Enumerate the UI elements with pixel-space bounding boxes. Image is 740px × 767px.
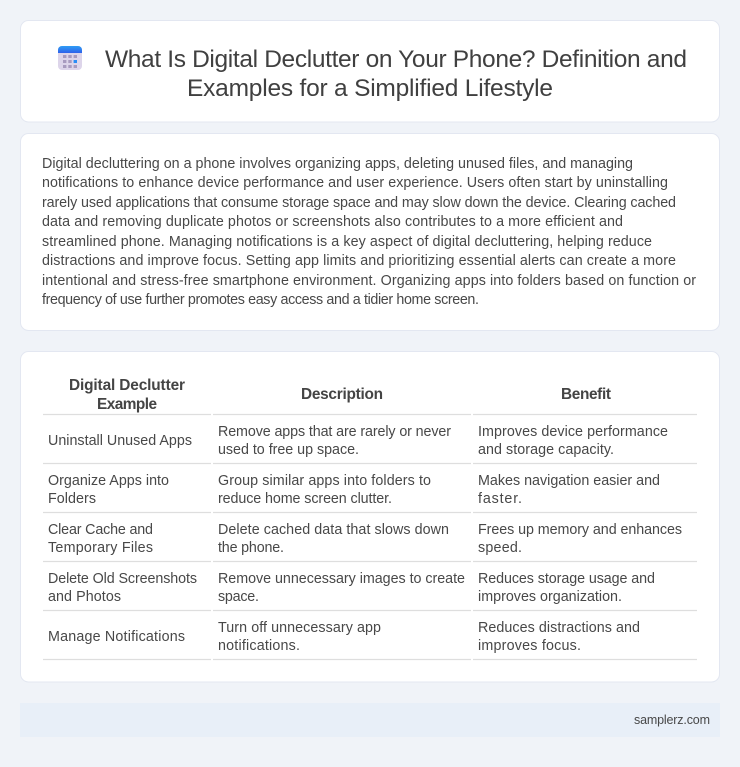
table header row: Description bbox=[301, 386, 383, 403]
panel: title card bbox=[20, 20, 720, 122]
table row: organize apps: Makes navigation easier and bbox=[478, 473, 660, 489]
table row: clear cache: Clear Cache and bbox=[48, 522, 153, 538]
table row: uninstall unused apps bbox=[48, 424, 668, 458]
table row: organize apps: reduce home screen clutter. bbox=[218, 491, 392, 507]
table row: clear cache: Temporary Files bbox=[48, 540, 153, 556]
footer: samplerz.com bbox=[634, 713, 710, 727]
table row: uninstall unused apps: Improves device performance bbox=[478, 424, 668, 440]
table row: clear cache bbox=[48, 522, 682, 556]
text block: introduction paragraph: rarely used applications that consume storage space and may slow down the device. Clearing cached bbox=[42, 195, 676, 211]
panel: examples table bbox=[20, 352, 720, 682]
table row: manage notifications: Turn off unnecessary app bbox=[218, 620, 381, 636]
table row: delete screenshots: space. bbox=[218, 589, 259, 605]
table row: manage notifications: improves focus. bbox=[478, 638, 581, 654]
table header row bbox=[69, 377, 611, 413]
table row: clear cache: the phone. bbox=[218, 540, 284, 556]
text block: introduction paragraph: distractions and improve focus. Setting app limits and prioritizing essential alerts can create a more bbox=[42, 253, 676, 269]
title: Examples for a Simplified Lifestyle bbox=[187, 75, 553, 102]
table row: delete screenshots: and Photos bbox=[48, 589, 121, 605]
table row: organize apps: Group similar apps into folders to bbox=[218, 473, 431, 489]
text block: introduction paragraph: frequency of use further promotes easy access and a tidier home screen. bbox=[42, 292, 479, 308]
text block: introduction paragraph: notifications to enhance device performance and user experience. Users often start by uninstalling bbox=[42, 175, 668, 191]
table row: clear cache: Frees up memory and enhances bbox=[478, 522, 682, 538]
table row: delete screenshots: Delete Old Screenshots bbox=[48, 571, 197, 587]
table row: delete screenshots bbox=[48, 571, 655, 605]
table row: uninstall unused apps: used to free up space. bbox=[218, 442, 359, 458]
title bbox=[105, 46, 687, 102]
table header row: Example bbox=[97, 396, 157, 413]
table row: clear cache: Delete cached data that slows down bbox=[218, 522, 449, 538]
table header row: Benefit bbox=[561, 386, 611, 403]
title: What Is Digital Declutter on Your Phone? Definition and bbox=[105, 46, 687, 73]
icon: phone app grid calendar bbox=[58, 46, 82, 70]
table row: uninstall unused apps: and storage capacity. bbox=[478, 442, 614, 458]
footer bbox=[20, 703, 720, 737]
table row: manage notifications: notifications. bbox=[218, 638, 300, 654]
table row: delete screenshots: Remove unnecessary images to create bbox=[218, 571, 465, 587]
text block: introduction paragraph bbox=[42, 156, 696, 308]
panel: introduction text bbox=[20, 134, 720, 330]
text block: introduction paragraph: data and removing duplicate photos or screenshots also contributes to a more efficient and bbox=[42, 214, 623, 230]
table row: organize apps: faster. bbox=[478, 491, 522, 507]
table header row: Digital Declutter bbox=[69, 377, 185, 394]
table row: organize apps bbox=[48, 473, 660, 507]
table row: manage notifications bbox=[48, 620, 640, 654]
text block: introduction paragraph: streamlined phone. Managing notifications is a key aspect of digital decluttering, helping reduce bbox=[42, 234, 652, 250]
table row: manage notifications: Reduces distractions and bbox=[478, 620, 640, 636]
table row: uninstall unused apps: Remove apps that are rarely or never bbox=[218, 424, 451, 440]
table row: delete screenshots: Reduces storage usage and bbox=[478, 571, 655, 587]
table row: delete screenshots: improves organization. bbox=[478, 589, 622, 605]
table row: organize apps: Organize Apps into bbox=[48, 473, 169, 489]
text block: introduction paragraph: Digital decluttering on a phone involves organizing apps, deleting unused files, and managing bbox=[42, 156, 633, 172]
table row: manage notifications: Manage Notifications bbox=[48, 629, 185, 645]
table row: clear cache: speed. bbox=[478, 540, 522, 556]
table row: uninstall unused apps: Uninstall Unused Apps bbox=[48, 433, 192, 449]
text block: introduction paragraph: intentional and stress-free smartphone environment. Organizing apps into folders based on function or bbox=[42, 273, 696, 289]
table row: organize apps: Folders bbox=[48, 491, 96, 507]
